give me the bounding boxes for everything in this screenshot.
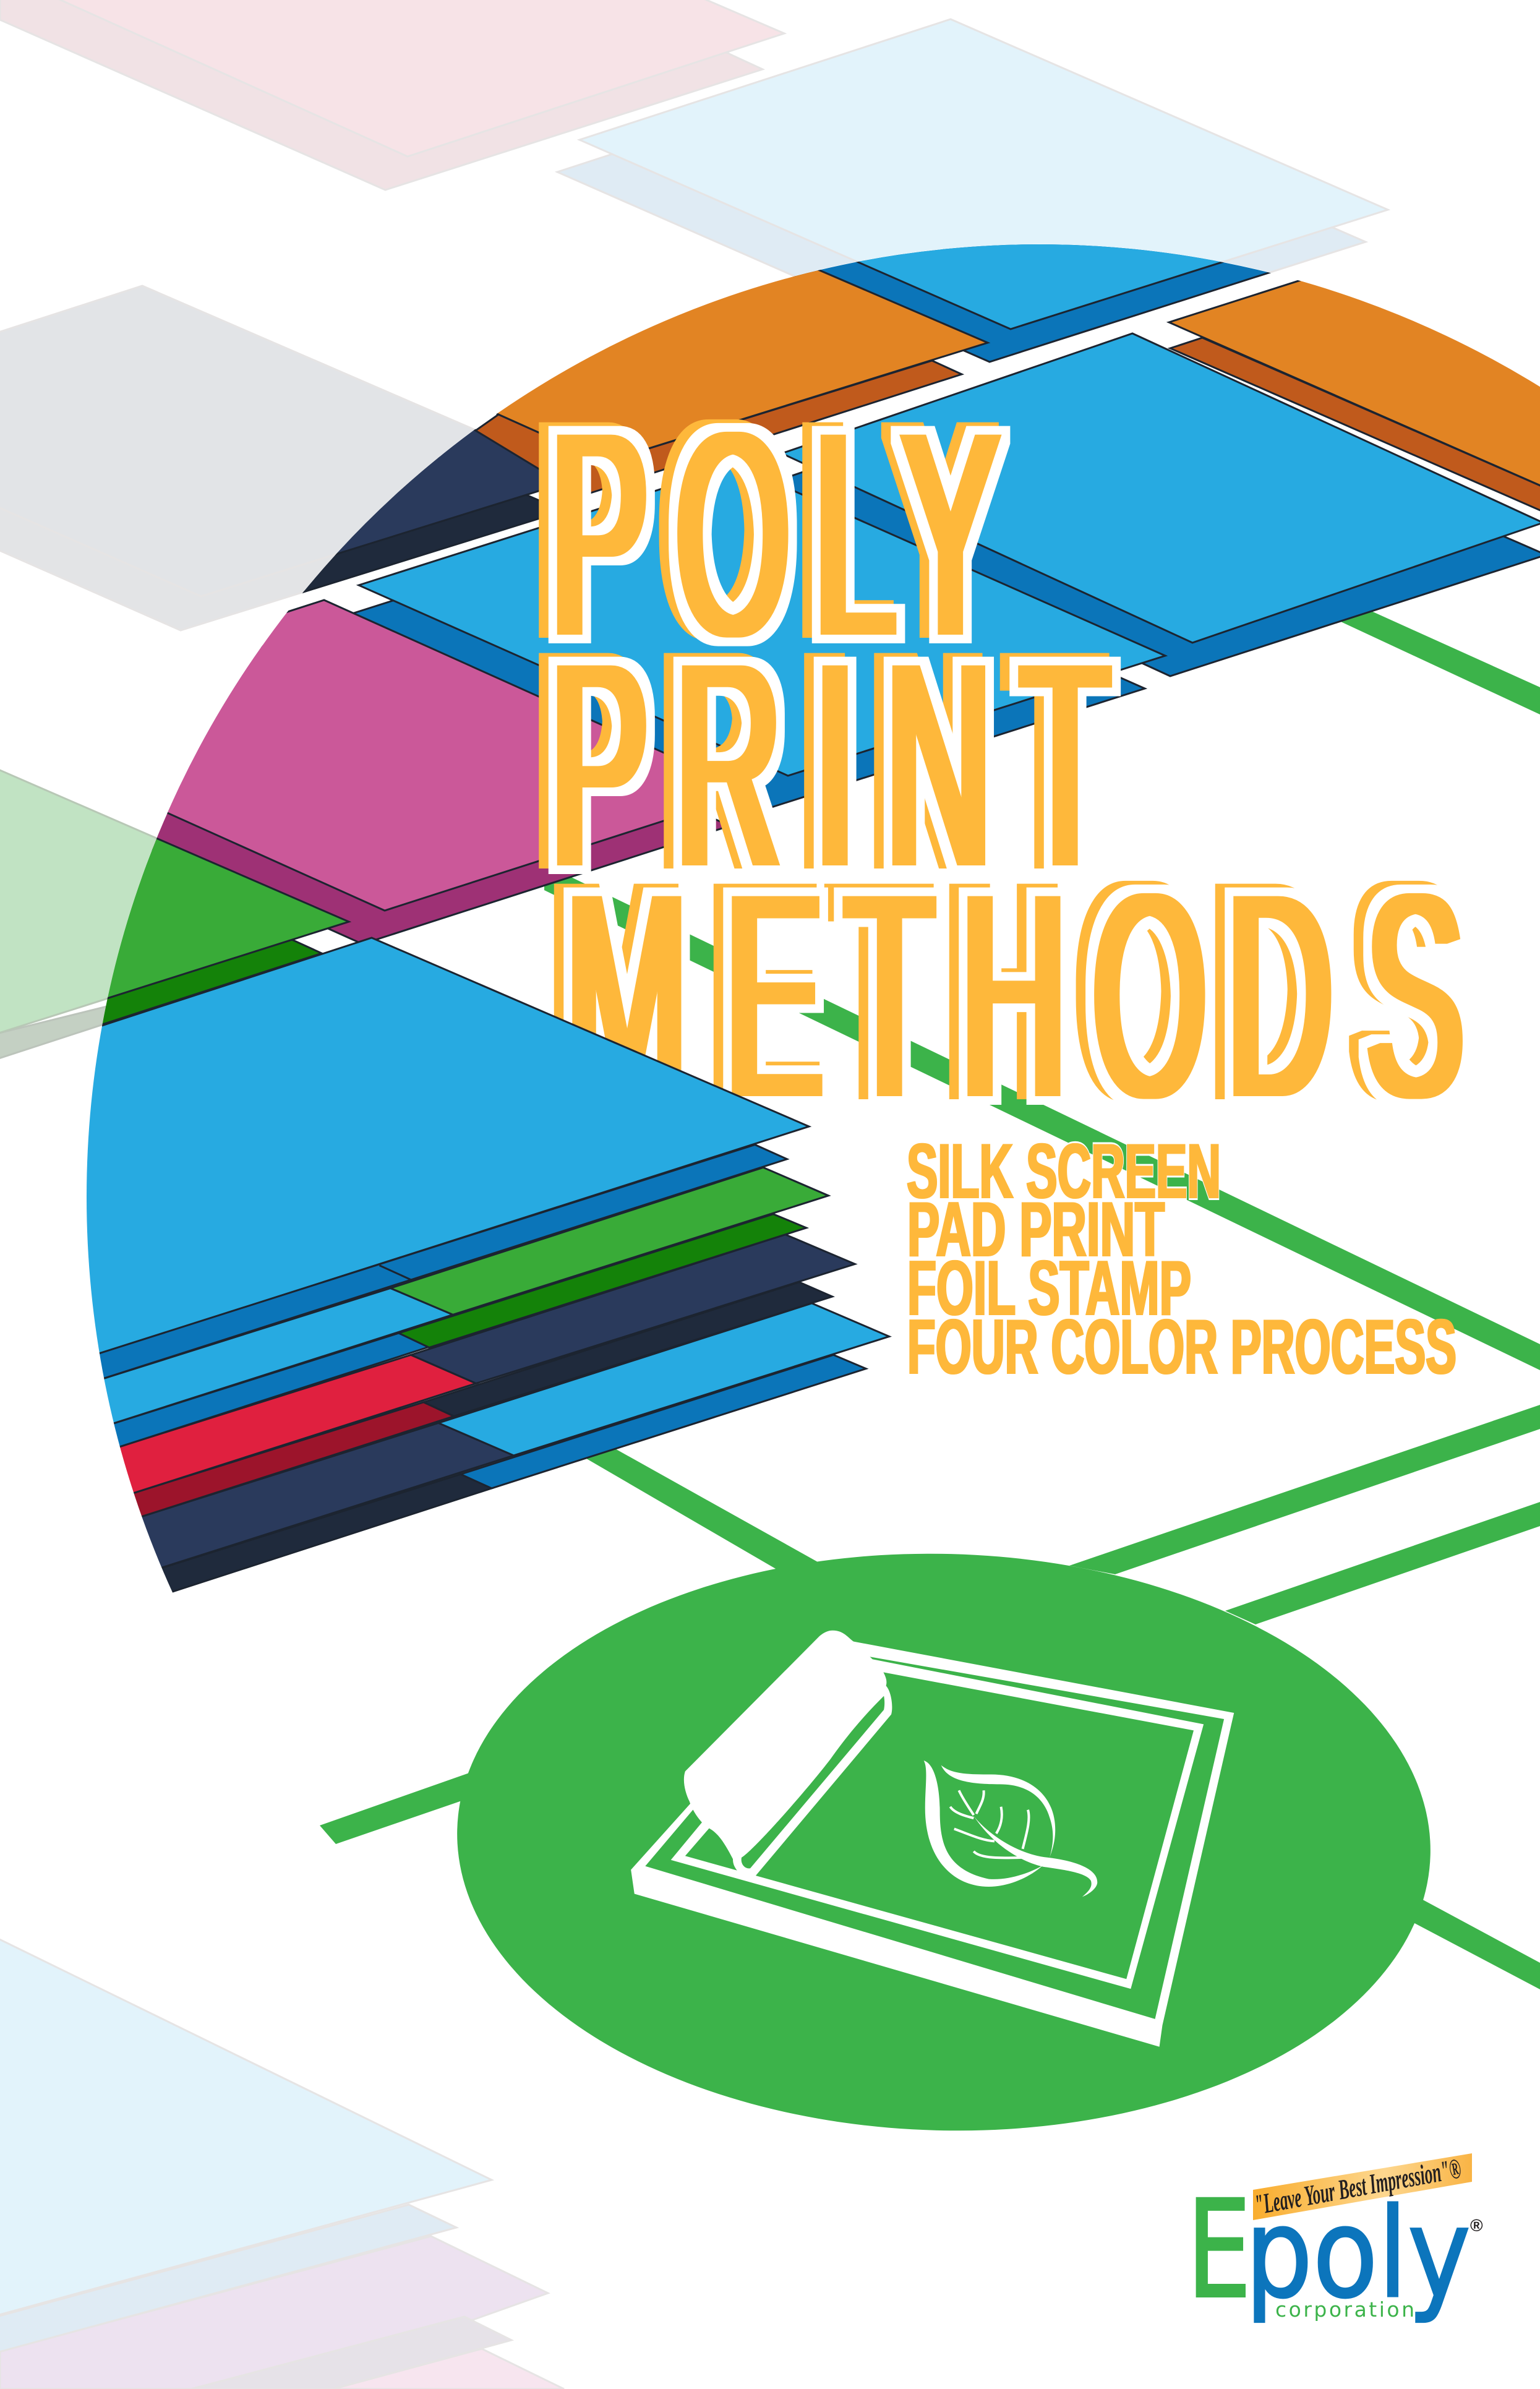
- title front layer: POLY: [551, 372, 999, 697]
- sheet: top blue: [557, 19, 1388, 362]
- title back layer: METHODS: [567, 833, 1463, 1158]
- list items: SILK SCREEN: [907, 1129, 1221, 1214]
- sheet: magenta: [0, 600, 752, 944]
- logo banner: [1253, 2153, 1472, 2220]
- stack: large blue sheet: [62, 938, 809, 1366]
- method list: [907, 1129, 1457, 1390]
- title: POLY PRINT METHODS: [551, 372, 1463, 1158]
- icon: leaf: [924, 1761, 1097, 1897]
- logo: Epoly corporation: [1187, 2152, 1483, 2328]
- sheet: green: [0, 768, 349, 1060]
- title white outline layer: METHODS: [567, 833, 1463, 1158]
- title back layer: POLY: [551, 372, 999, 697]
- green oval: [450, 1542, 1438, 2143]
- sheet: large blue right: [759, 333, 1540, 676]
- title back layer: PRINT: [551, 603, 1110, 927]
- circular window: upper sheets: [0, 19, 1540, 1060]
- title white outline layer: PRINT: [551, 603, 1110, 927]
- sheet: blue centre: [338, 465, 1165, 808]
- list items: [907, 1129, 1457, 1390]
- logo word corporation: corporation: [1275, 2297, 1414, 2322]
- logo registered mark: ®: [1470, 2216, 1483, 2235]
- title front layer: METHODS: [567, 833, 1463, 1158]
- stack: layered edges: [84, 1144, 889, 1617]
- sheet: navy: [0, 286, 584, 630]
- faded sheets: pink, top left: [0, 0, 784, 190]
- list items: PAD PRINT: [907, 1187, 1165, 1272]
- title front layer: PRINT: [551, 603, 1110, 927]
- title front layer: [551, 372, 1463, 1158]
- faded sheets: grey, left: [0, 285, 475, 631]
- icon: screen print frame with squeegee: [631, 1631, 1234, 2047]
- faded sheets: light blue, top: [555, 19, 1390, 277]
- green connector lines: [320, 594, 1540, 1989]
- circular window: lower sheet stack: [62, 938, 889, 1617]
- title white outline layer: [551, 372, 1463, 1158]
- logo letters poly: poly: [1245, 2182, 1471, 2326]
- faded sheets: bottom left stack: [0, 1938, 564, 2389]
- halo behind first line: SILK SCREEN: [907, 1129, 1221, 1214]
- faded sheets: green, left: [0, 769, 349, 1059]
- logo letter E: E: [1187, 2172, 1251, 2328]
- sheet: orange left: [309, 210, 988, 495]
- list items: FOIL STAMP: [907, 1246, 1191, 1331]
- sheet: orange right: [1169, 221, 1540, 540]
- title white outline layer: POLY: [551, 372, 999, 697]
- title back layer: [551, 372, 1463, 1158]
